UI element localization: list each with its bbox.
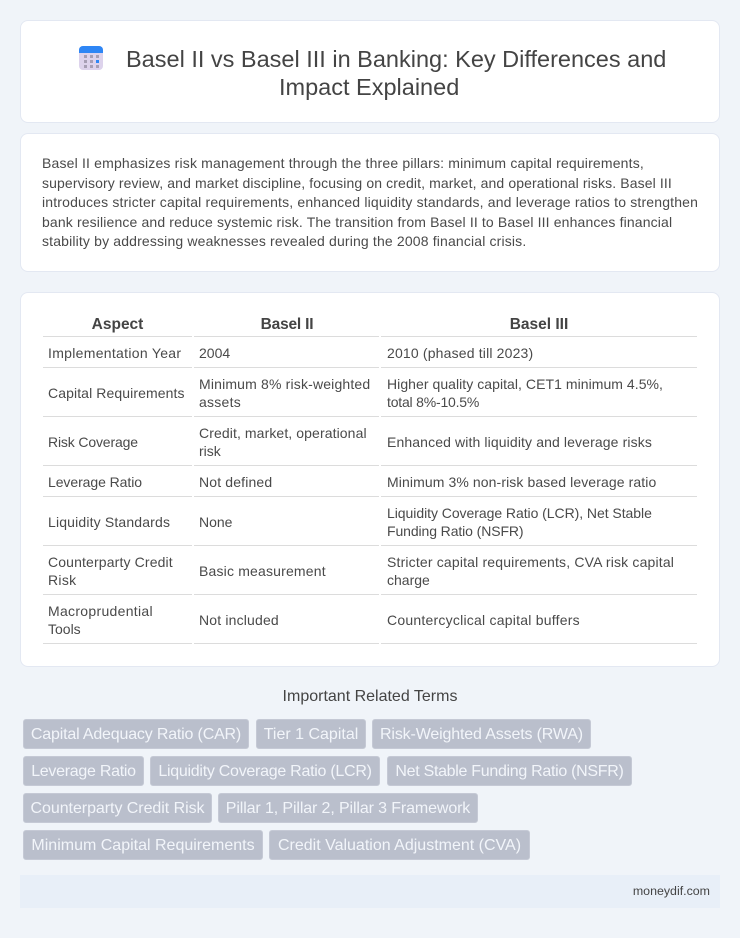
row: leverage ratio: Not defined bbox=[199, 474, 272, 490]
footer source text: moneydif.com bbox=[633, 884, 710, 898]
tag bbox=[23, 793, 212, 823]
row: liquidity standards: Liquidity Standards bbox=[48, 514, 170, 530]
row: liquidity standards: Funding Ratio (NSFR) bbox=[387, 523, 524, 539]
tag bbox=[269, 830, 530, 860]
comparison table bbox=[43, 316, 697, 644]
icon: calendar bbox=[79, 46, 103, 70]
row: macroprudential tools: Countercyclical capital buffers bbox=[387, 612, 580, 628]
text block: introduction: supervisory review, and market discipline, focusing on credit, market, and operational risks. Basel III bbox=[42, 175, 672, 191]
row: counterparty credit risk: Counterparty Credit bbox=[48, 554, 173, 570]
text block: introduction: Basel II emphasizes risk management through the three pillars: minimum capital requirements, bbox=[42, 155, 644, 171]
title bbox=[126, 46, 666, 100]
row: risk coverage: risk bbox=[199, 443, 221, 459]
row: risk coverage bbox=[48, 425, 652, 459]
row: capital requirements: Capital Requirements bbox=[48, 385, 185, 401]
row: macroprudential tools bbox=[48, 603, 580, 637]
heading: important related terms: Important Related Terms bbox=[283, 688, 457, 705]
tag bbox=[256, 719, 366, 749]
row: implementation year: Implementation Year bbox=[48, 345, 181, 361]
text block: introduction: stability by addressing weaknesses revealed during the 2008 financial crisis. bbox=[42, 233, 526, 249]
tag bbox=[372, 719, 591, 749]
title: Basel II vs Basel III in Banking: Key Differences and bbox=[126, 46, 666, 72]
tag: Liquidity Coverage Ratio (LCR) bbox=[158, 763, 372, 780]
table header: Basel II bbox=[261, 316, 313, 333]
row: counterparty credit risk: charge bbox=[387, 572, 430, 588]
tag: Credit Valuation Adjustment (CVA) bbox=[278, 837, 521, 854]
row: macroprudential tools: Macroprudential bbox=[48, 603, 153, 619]
tag: Leverage Ratio bbox=[31, 763, 136, 780]
tag: Capital Adequacy Ratio (CAR) bbox=[31, 726, 241, 743]
row: counterparty credit risk bbox=[48, 554, 674, 588]
row: implementation year bbox=[48, 345, 533, 361]
row: risk coverage: Credit, market, operational bbox=[199, 425, 367, 441]
panel: introduction bbox=[20, 133, 720, 272]
text block: introduction bbox=[42, 155, 698, 249]
row: counterparty credit risk: Risk bbox=[48, 572, 76, 588]
row: implementation year: 2004 bbox=[199, 345, 230, 361]
row: capital requirements: assets bbox=[199, 394, 241, 410]
tag bbox=[218, 793, 478, 823]
tag: Tier 1 Capital bbox=[264, 726, 358, 743]
panel: comparison table bbox=[20, 292, 720, 667]
tag: Minimum Capital Requirements bbox=[31, 837, 255, 854]
footer bbox=[20, 875, 720, 908]
row: capital requirements: Higher quality capital, CET1 minimum 4.5%, bbox=[387, 376, 663, 392]
tag: Net Stable Funding Ratio (NSFR) bbox=[395, 763, 624, 780]
tag bbox=[23, 756, 144, 786]
related terms tags bbox=[23, 719, 632, 860]
table header: Basel III bbox=[510, 316, 568, 333]
row: capital requirements: total 8%-10.5% bbox=[387, 394, 479, 410]
row: leverage ratio: Minimum 3% non-risk based leverage ratio bbox=[387, 474, 656, 490]
text block: introduction: introduces stricter capital requirements, enhanced liquidity standards, and leverage ratios to strengthen bbox=[42, 194, 698, 210]
table header: Aspect bbox=[92, 316, 143, 333]
title: Impact Explained bbox=[279, 74, 459, 100]
row: risk coverage: Risk Coverage bbox=[48, 434, 138, 450]
row: macroprudential tools: Tools bbox=[48, 621, 81, 637]
row: liquidity standards: None bbox=[199, 514, 232, 530]
tag bbox=[387, 756, 632, 786]
tag: Counterparty Credit Risk bbox=[30, 800, 204, 817]
row: counterparty credit risk: Stricter capital requirements, CVA risk capital bbox=[387, 554, 674, 570]
row: risk coverage: Enhanced with liquidity and leverage risks bbox=[387, 434, 652, 450]
tag bbox=[150, 756, 380, 786]
row: leverage ratio: Leverage Ratio bbox=[48, 474, 142, 490]
row: leverage ratio bbox=[48, 474, 656, 490]
tag: Pillar 1, Pillar 2, Pillar 3 Framework bbox=[226, 800, 470, 817]
tag bbox=[23, 719, 249, 749]
tag: Risk-Weighted Assets (RWA) bbox=[380, 726, 583, 743]
panel: header bbox=[20, 20, 720, 123]
row: implementation year: 2010 (phased till 2023) bbox=[387, 345, 533, 361]
tag bbox=[23, 830, 263, 860]
row: counterparty credit risk: Basic measurement bbox=[199, 563, 326, 579]
table header bbox=[92, 316, 568, 333]
row: liquidity standards bbox=[48, 505, 652, 539]
row: liquidity standards: Liquidity Coverage Ratio (LCR), Net Stable bbox=[387, 505, 652, 521]
row: capital requirements bbox=[48, 376, 663, 410]
row: capital requirements: Minimum 8% risk-weighted bbox=[199, 376, 370, 392]
text block: introduction: bank resilience and reduce systemic risk. The transition from Basel II to Basel III enhances financial bbox=[42, 214, 672, 230]
row: macroprudential tools: Not included bbox=[199, 612, 279, 628]
